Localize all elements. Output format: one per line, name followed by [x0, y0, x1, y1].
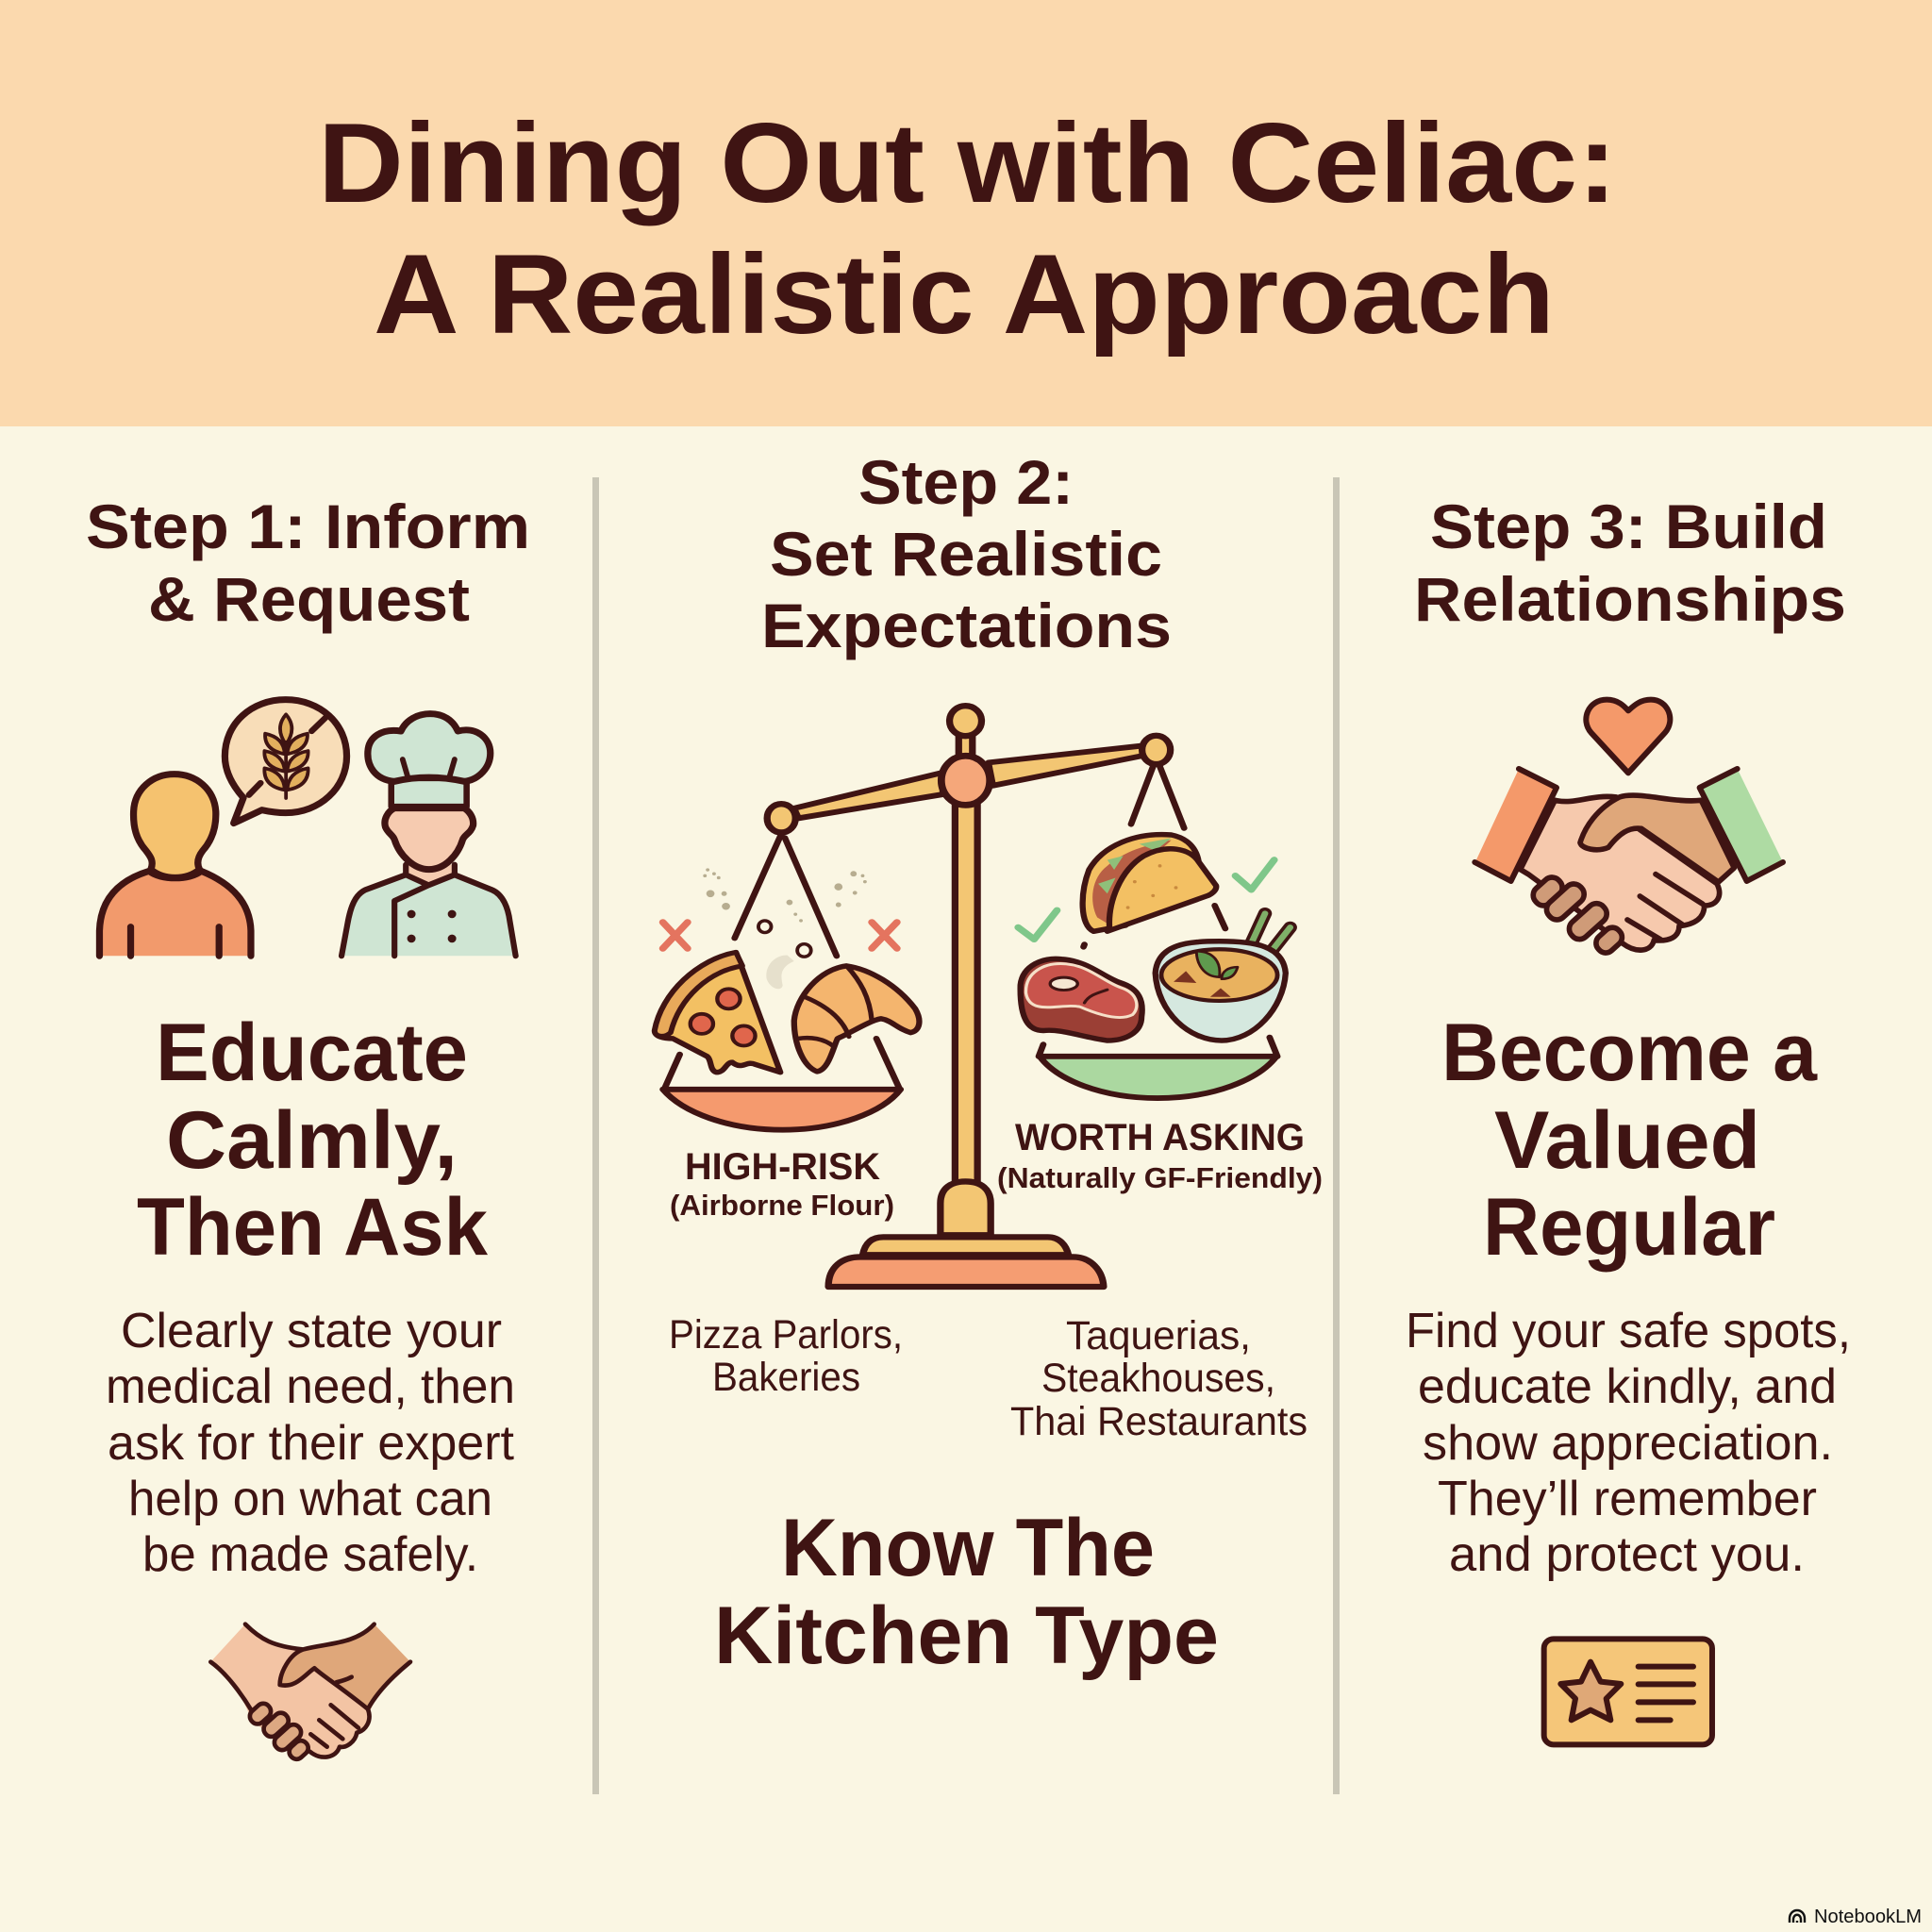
body text: step 1: Clearly state your	[121, 1304, 502, 1358]
body text: step 3: show appreciation.	[1423, 1416, 1833, 1471]
subheading: know the kitchen type: Kitchen Type	[714, 1591, 1219, 1681]
check marks	[1018, 860, 1274, 940]
title: Dining Out with Celiac:	[318, 100, 1617, 226]
heading: step 3	[1414, 491, 1846, 634]
right pan: worth asking	[1018, 767, 1291, 1098]
heart	[1586, 700, 1670, 773]
examples: high-risk kitchens: Bakeries	[712, 1355, 860, 1400]
label: high-risk: (Airborne Flour)	[670, 1189, 894, 1222]
cuffs	[1474, 769, 1783, 881]
hands	[1521, 795, 1734, 957]
subheading: know the kitchen type: Know The	[781, 1503, 1155, 1593]
icon: diner and chef conversation	[99, 700, 516, 956]
examples: high-risk kitchens	[669, 1312, 903, 1400]
body text: step 3: and protect you.	[1449, 1527, 1805, 1582]
body text: step 3: Find your safe spots,	[1406, 1304, 1851, 1358]
label: worth asking	[997, 1117, 1323, 1194]
label: worth asking: WORTH ASKING	[1015, 1117, 1305, 1158]
heading: step 1: & Request	[148, 564, 470, 634]
icon: handshake with heart	[1474, 700, 1783, 957]
left pan: high-risk	[655, 834, 919, 1130]
subheading: know the kitchen type	[714, 1503, 1219, 1681]
heading: step 3: Relationships	[1414, 564, 1846, 634]
subheading: educate calmly: Then Ask	[137, 1182, 488, 1273]
body text: step 1: be made safely.	[142, 1527, 478, 1582]
subheading: educate calmly: Calmly,	[166, 1095, 458, 1186]
subheading: educate calmly: Educate	[156, 1008, 468, 1098]
taco	[1083, 835, 1216, 931]
body text: step 1: medical need, then	[106, 1359, 515, 1414]
chart: balance scale	[655, 706, 1291, 1287]
label: high-risk: HIGH-RISK	[685, 1146, 880, 1188]
body text: step 3: educate kindly, and	[1418, 1359, 1837, 1414]
body text: step 3: They’ll remember	[1438, 1472, 1817, 1526]
subheading: become a valued regular: Valued	[1494, 1095, 1760, 1186]
speech bubble with crossed wheat	[225, 700, 347, 824]
heading: step 2: Expectations	[761, 591, 1172, 660]
body text: step 1: ask for their expert	[108, 1416, 515, 1471]
steak	[1021, 958, 1142, 1041]
person	[99, 774, 251, 956]
icon: small handshake	[210, 1624, 410, 1762]
heading: step 1: Step 1: Inform	[86, 491, 530, 561]
x marks	[663, 923, 897, 948]
body text: step 1: help on what can	[128, 1472, 492, 1526]
subheading: become a valued regular: Become a	[1441, 1008, 1818, 1098]
heading: step 2	[761, 447, 1172, 660]
label: high-risk	[670, 1146, 894, 1222]
body text: step 3	[1406, 1304, 1851, 1582]
heading: step 1	[86, 491, 530, 634]
subheading: become a valued regular	[1441, 1008, 1818, 1273]
bowl of curry	[1156, 913, 1291, 1041]
subheading: become a valued regular: Regular	[1483, 1182, 1775, 1273]
examples: worth-asking kitchens: Steakhouses,	[1041, 1356, 1275, 1401]
flour particles	[703, 868, 867, 989]
examples: high-risk kitchens: Pizza Parlors,	[669, 1312, 903, 1357]
watermark: NotebookLM: NotebookLM	[1814, 1907, 1922, 1927]
subheading: educate calmly	[137, 1008, 488, 1273]
examples: worth-asking kitchens	[1010, 1313, 1307, 1444]
panel: step 2	[655, 447, 1323, 1681]
croissant	[794, 966, 919, 1072]
panel: step 1	[86, 491, 530, 1762]
title	[318, 100, 1617, 358]
panel: step 3	[1406, 491, 1851, 1744]
pizza slice	[655, 953, 780, 1073]
heading: step 2: Step 2:	[858, 447, 1074, 517]
body text: step 1	[106, 1304, 515, 1582]
chef	[341, 714, 516, 956]
examples: worth-asking kitchens: Taquerias,	[1066, 1313, 1251, 1358]
scale post and base	[828, 802, 1104, 1287]
header band	[0, 0, 1932, 426]
label: worth asking: (Naturally GF-Friendly)	[997, 1161, 1323, 1194]
heading: step 3: Step 3: Build	[1430, 491, 1827, 561]
scale beam	[767, 706, 1171, 832]
heading: step 2: Set Realistic	[770, 519, 1162, 589]
icon: loyalty card with star	[1544, 1639, 1712, 1744]
examples: worth-asking kitchens: Thai Restaurants	[1010, 1399, 1307, 1444]
title: A Realistic Approach	[374, 231, 1555, 358]
